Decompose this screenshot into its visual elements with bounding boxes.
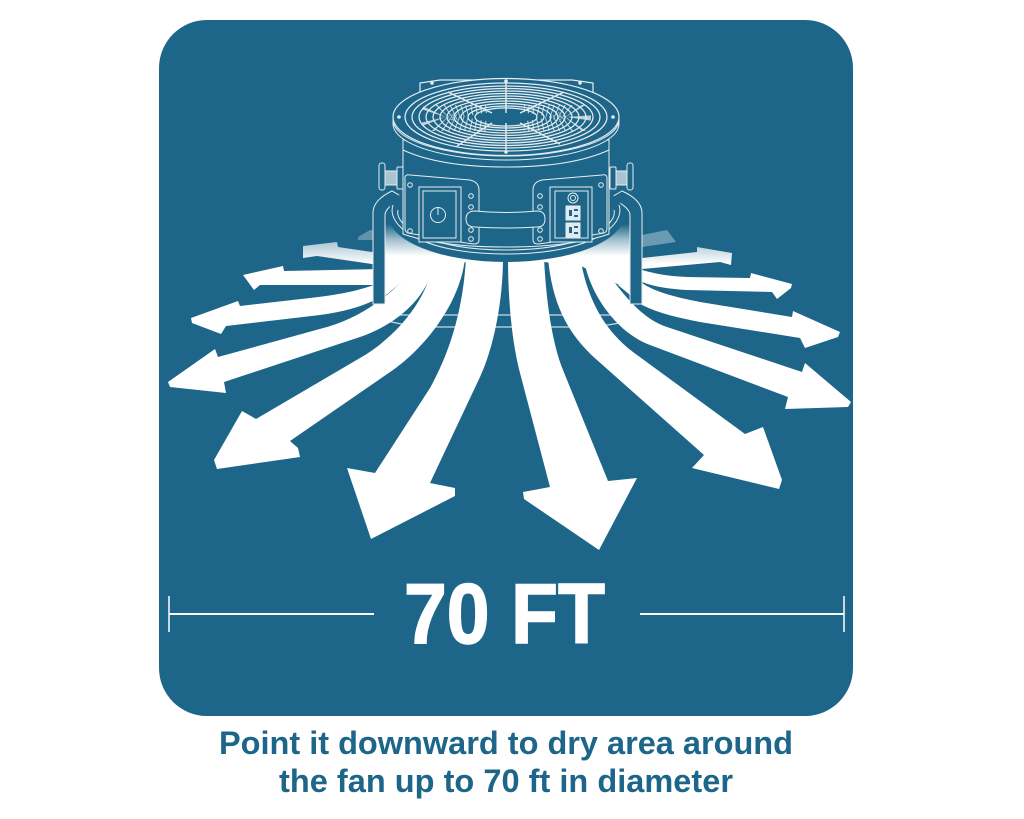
floor ring lines behind the airflow	[385, 315, 630, 327]
heading: 70 FT: 70 FT	[404, 567, 605, 662]
dimension line: right	[640, 596, 844, 632]
right stand leg	[610, 191, 642, 304]
outlet upper	[566, 206, 580, 220]
arrow: far left fading	[303, 242, 388, 267]
arrow: right 1	[625, 270, 792, 299]
arrow: right 3	[585, 265, 851, 409]
icon: fan	[373, 78, 642, 304]
caption: the fan up to 70 ft in diameter	[279, 763, 733, 799]
caption: Point it downward to dry area around	[219, 725, 793, 761]
grille	[393, 78, 619, 156]
arrow: far right fading	[625, 247, 732, 269]
caption	[219, 725, 793, 799]
airflow glow under the fan	[385, 224, 630, 296]
arrow: right 5	[508, 258, 637, 550]
base ring	[388, 168, 624, 262]
arrow: right 2	[618, 283, 840, 348]
airflow arrows: right side	[508, 230, 851, 550]
flange lower edges	[393, 84, 619, 160]
outlet lower	[566, 223, 580, 237]
arrow: left 3	[168, 268, 433, 393]
fan body	[403, 140, 609, 247]
arrow: upper left faint	[358, 230, 385, 240]
flange bolts	[397, 79, 615, 154]
airflow arrows: left side	[168, 230, 503, 539]
grille side mesh	[422, 105, 591, 131]
hub	[489, 113, 523, 123]
right knob	[610, 163, 633, 190]
right control plate	[533, 175, 607, 244]
arrow: left 4	[214, 258, 465, 469]
body trim lines	[403, 150, 609, 167]
dimension line: left	[169, 596, 374, 632]
left knob	[379, 163, 403, 190]
panel: blue background	[159, 20, 853, 716]
arrow: left 1	[243, 266, 385, 290]
arrow: right 4	[548, 258, 782, 489]
arrow: upper right faint	[642, 230, 676, 247]
left control plate	[405, 175, 479, 244]
left stand leg	[373, 191, 404, 304]
arrow: left 5	[347, 258, 503, 539]
rear bracket	[420, 80, 593, 96]
arrow: left 2	[191, 283, 399, 334]
carry handle	[466, 211, 545, 228]
grille spokes	[448, 80, 564, 152]
